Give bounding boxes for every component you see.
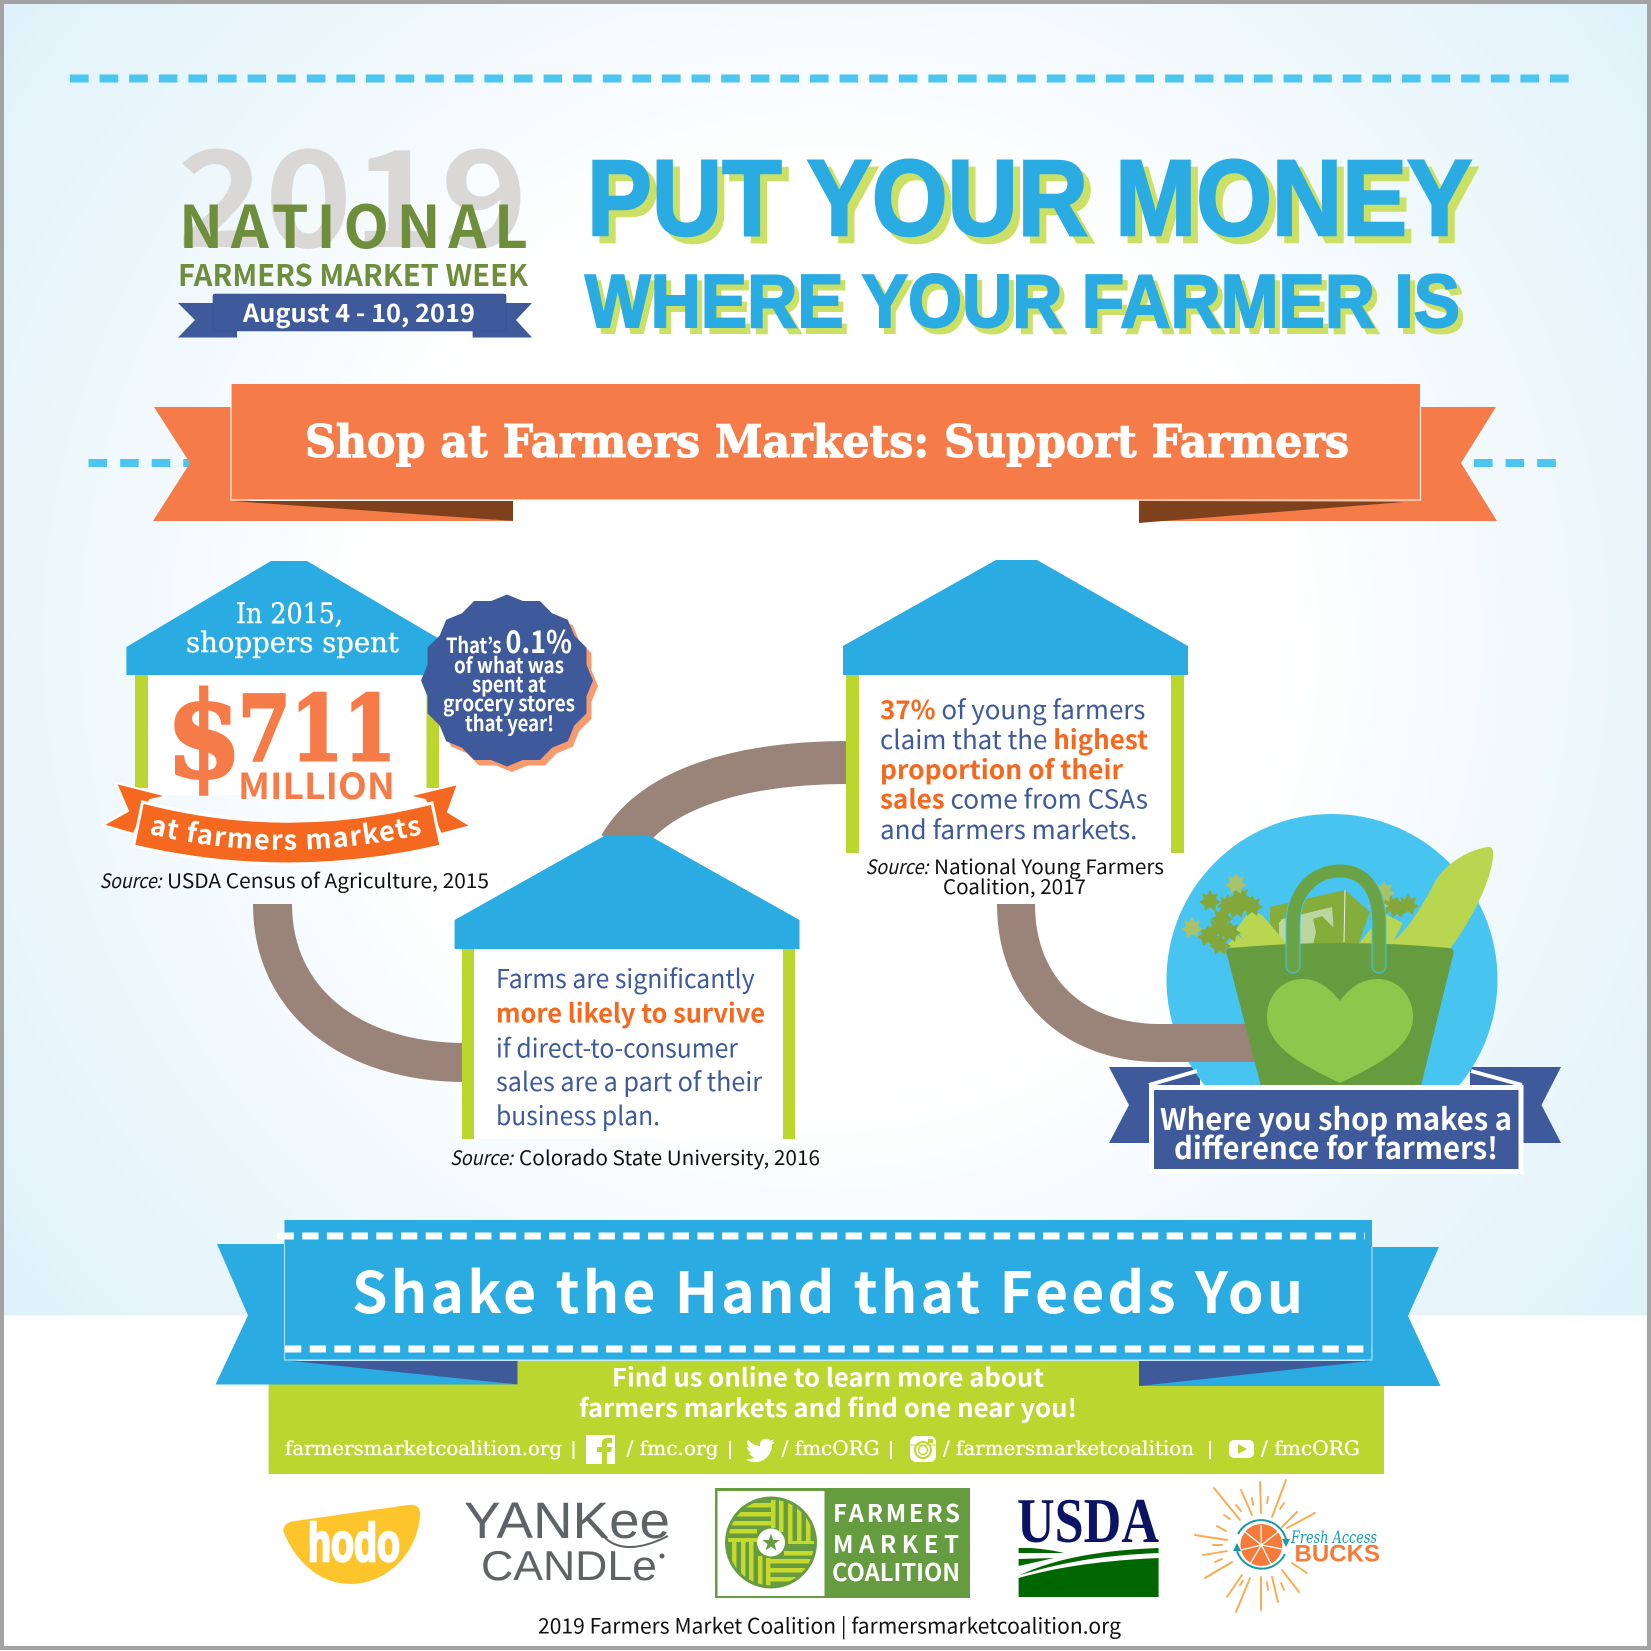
callout badge: 0.1%: That’s 0.1% <box>446 617 572 662</box>
callout badge: 0.1%: spent at <box>472 669 546 699</box>
dollar amount: $ <box>166 666 242 805</box>
curved ribbon: at farmers markets <box>151 819 421 850</box>
folds <box>292 1361 518 1384</box>
logo: USDA <box>1017 1485 1159 1597</box>
million: MILLION <box>238 758 395 810</box>
callout: where you shop, shopping bag: difference for farmers! <box>1174 1124 1498 1168</box>
social links row: farmersmarketcoalition.org <box>285 1436 562 1460</box>
title text <box>585 137 1472 343</box>
banner face <box>231 384 1420 500</box>
body text: 37% of young farmers <box>880 690 1145 727</box>
left tail <box>216 1244 518 1384</box>
orange fruit <box>1240 1524 1282 1566</box>
title shadow: WHERE YOUR FARMER IS <box>590 265 1465 349</box>
callout badge: 0.1% <box>421 594 598 772</box>
body text <box>496 959 765 1133</box>
source: Source: <box>100 865 163 894</box>
source: Colorado State University, 2016 <box>519 1142 820 1171</box>
circle <box>1166 814 1498 1145</box>
roof text: In 2015, <box>236 597 343 630</box>
logo: Yankee Candle <box>464 1492 670 1589</box>
callout: where you shop, shopping bag <box>1016 814 1561 1172</box>
banner face <box>284 1220 1372 1360</box>
connector to bag <box>1016 904 1265 1043</box>
body text: sales are a part of their <box>496 1062 763 1099</box>
body text: sales come from CSAs <box>880 780 1148 817</box>
body text: proportion of their <box>880 750 1124 787</box>
stitches <box>278 1236 1372 1349</box>
title text: WHERE YOUR FARMER IS <box>585 259 1460 343</box>
roof <box>455 836 800 949</box>
callout badge: 0.1%: that year! <box>465 708 554 738</box>
callout: where you shop, shopping bag: Where you shop makes a <box>1160 1095 1512 1139</box>
source: Source: <box>450 1142 514 1171</box>
source <box>866 851 1164 900</box>
posts <box>135 675 148 788</box>
icon: youtube <box>1229 1440 1254 1458</box>
roof <box>126 561 453 675</box>
leaves <box>1197 886 1419 955</box>
social links row: / farmersmarketcoalition <box>943 1436 1194 1460</box>
banner heading: Shake the Hand that Feeds You <box>352 1248 1303 1330</box>
logo: hodo <box>283 1505 420 1584</box>
ribbon face <box>1152 1088 1521 1172</box>
blue banner: shake the hand <box>216 1220 1441 1386</box>
box <box>1270 890 1370 945</box>
title text: PUT YOUR MONEY <box>587 137 1472 258</box>
panel: house 1, $711 million: shoppers spent <box>186 626 400 659</box>
logo: Farmers Market Coalition: FARMERS <box>833 1494 960 1529</box>
roof <box>843 560 1188 675</box>
word National: NATIONAL <box>179 180 528 265</box>
body text: if direct-to-consumer <box>496 1029 739 1066</box>
main title <box>585 137 1479 349</box>
callout badge: 0.1%: grocery stores <box>443 688 575 718</box>
source: USDA Census of Agriculture, 2015 <box>167 865 489 894</box>
wordmark: Fresh Access <box>1290 1528 1377 1548</box>
icon: facebook <box>586 1435 615 1464</box>
date ribbon: August 4 - 10, 2019 <box>242 294 475 330</box>
panel: green find us online <box>269 1358 1384 1474</box>
callout badge: 0.1%: of what was <box>454 650 564 680</box>
logo: Farmers Market Coalition: MARKET <box>833 1525 959 1560</box>
stalks <box>1225 935 1262 949</box>
social links row <box>285 1435 1360 1464</box>
logo: Farmers Market Coalition: COALITION <box>832 1553 960 1588</box>
left tail <box>153 407 513 521</box>
ribbon fold lines <box>1149 1071 1522 1085</box>
social links row: / fmc.org <box>626 1436 719 1460</box>
body text: claim that the highest <box>880 720 1148 757</box>
social links row: / fmcORG <box>782 1436 880 1460</box>
source: Source: <box>866 851 930 880</box>
year 2019: 2019 <box>177 92 528 286</box>
logo: 2019 National Farmers Market Week <box>177 92 532 338</box>
logo: Fresh Access Bucks: BUCKS <box>1294 1541 1380 1568</box>
logo: Fresh Access Bucks <box>1195 1480 1380 1612</box>
orange banner <box>153 384 1497 523</box>
bag body <box>1226 943 1454 1086</box>
right tail <box>1139 407 1497 521</box>
right tail <box>1139 1247 1441 1386</box>
logo: USDA: USDA <box>1017 1485 1159 1556</box>
logo: Farmers Market Coalition <box>715 1488 970 1598</box>
title shadow: PUT YOUR MONEY <box>594 144 1479 265</box>
side dashes <box>88 459 1556 467</box>
panel: house 1, $711 million: 711 <box>238 676 396 782</box>
body text: Farms are significantly <box>496 959 755 996</box>
panel: green find us online: farmers markets and find one near you! <box>579 1389 1077 1425</box>
logo: Yankee Candle: CANDLe <box>481 1542 657 1589</box>
logo: Yankee Candle: YANKee <box>464 1492 670 1549</box>
baguette <box>1388 847 1493 949</box>
panel: house 2, 37% of young farmers <box>843 560 1188 900</box>
body text: and farmers markets. <box>880 810 1137 847</box>
body text: business plan. <box>496 1096 660 1133</box>
source: National Young Farmers <box>934 851 1164 880</box>
social links row: / fmcORG <box>1261 1436 1360 1460</box>
icon: instagram <box>910 1436 936 1462</box>
body text: more likely to survive <box>496 994 765 1030</box>
bag handle <box>1293 871 1379 966</box>
bag contents <box>1181 847 1493 955</box>
ribbon tails <box>1109 1067 1200 1143</box>
icon: twitter <box>746 1439 775 1462</box>
title shadow <box>590 144 1479 349</box>
date ribbon <box>178 294 532 338</box>
body text <box>880 690 1148 847</box>
source: Coalition, 2017 <box>943 871 1086 900</box>
top dashed line <box>70 74 1570 82</box>
logo: hodo: hodo <box>308 1513 400 1573</box>
connector paths <box>272 762 850 1062</box>
cycle arrows <box>1238 1520 1286 1539</box>
panel: house 1, $711 million <box>100 561 489 894</box>
emblem <box>725 1496 818 1590</box>
Farmers Market Week: FARMERS MARKET WEEK <box>178 251 528 295</box>
footer credit: 2019 Farmers Market Coalition | farmersmarketcoalition.org <box>538 1610 1121 1640</box>
banner heading: Shop at Farmers Markets: Support Farmers <box>305 415 1349 468</box>
curved ribbon <box>100 782 468 865</box>
heart <box>1267 979 1413 1083</box>
house interior <box>148 675 427 795</box>
folds <box>232 501 513 521</box>
panel: house 3, farms more likely to survive <box>450 836 820 1171</box>
panel: green find us online: Find us online to learn more about <box>612 1358 1044 1394</box>
sun rays <box>1195 1480 1315 1612</box>
